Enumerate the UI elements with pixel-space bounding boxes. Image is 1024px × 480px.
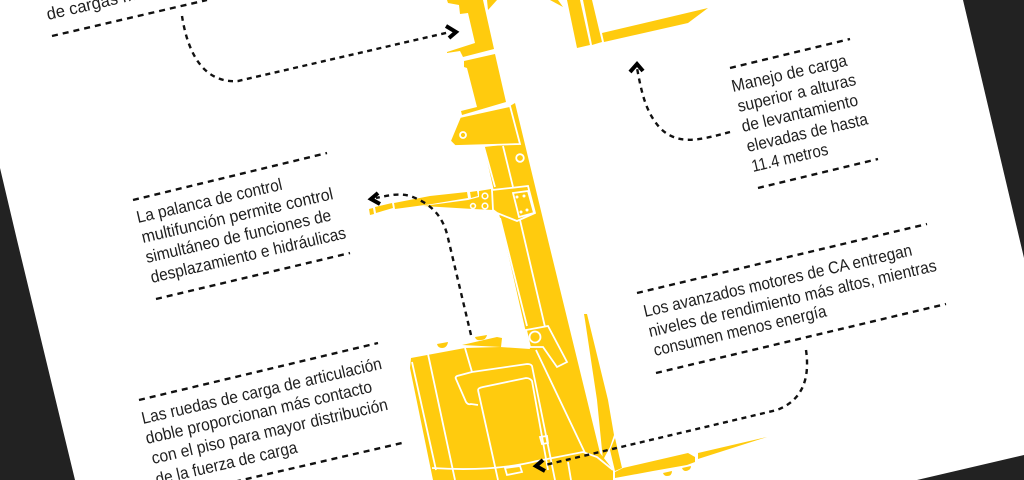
lower mast and truck body <box>410 103 613 480</box>
callout: ruedas de carga <box>139 343 402 480</box>
callout: motores de CA: Los avanzados motores de CA entregan <box>642 241 914 321</box>
control lever <box>369 189 494 215</box>
lever pivots <box>471 193 488 209</box>
callout: manejo de carga: superior a alturas <box>736 70 858 116</box>
callout: ruedas de carga: doble proporcionan más contacto <box>144 377 374 448</box>
mast plate with pivot <box>450 106 524 162</box>
rear forks <box>584 314 767 478</box>
callout: motores de CA: niveles de rendimiento más altos, mientras <box>647 256 938 341</box>
callout: palanca de control <box>133 153 350 299</box>
callout: manejo de carga <box>730 39 878 188</box>
callout: ruedas de carga: con el piso para mayor distribución <box>150 395 390 468</box>
connector: motores to truck <box>536 350 807 471</box>
callout: ruedas de carga: Las ruedas de carga de articulación <box>140 354 384 428</box>
callout: palanca de control: La palanca de control <box>135 175 284 227</box>
connector: palanca to lever <box>371 193 471 335</box>
connector: manejo de carga to fork <box>630 64 730 140</box>
upper fork carriage <box>550 0 708 48</box>
callout: manejo de carga: de levantamiento <box>740 91 860 136</box>
control bracket <box>492 186 535 221</box>
cab panel lines <box>412 348 613 480</box>
upper mast section <box>447 0 506 115</box>
callout: manejo de carga: Manejo de carga <box>730 51 849 96</box>
mast pivot bracket <box>526 326 567 367</box>
callout: motores de CA: consumen menos energía <box>652 301 829 360</box>
operator compartment bumps <box>437 335 502 348</box>
callout: top left text <box>45 0 207 36</box>
forklift illustration <box>369 0 767 480</box>
callout: manejo de carga: 11.4 metros <box>750 140 830 176</box>
callout: palanca de control: desplazamiento e hidráulicas <box>149 223 348 287</box>
callout: motores de CA <box>637 224 946 373</box>
connector: top left to mast <box>182 16 456 81</box>
callout: palanca de control: simultáneo de funciones de <box>144 206 333 267</box>
callout: palanca de control: multifunción permite control <box>140 184 335 247</box>
callout: manejo de carga: elevadas de hasta <box>745 109 870 156</box>
mast channel lines <box>484 146 545 327</box>
